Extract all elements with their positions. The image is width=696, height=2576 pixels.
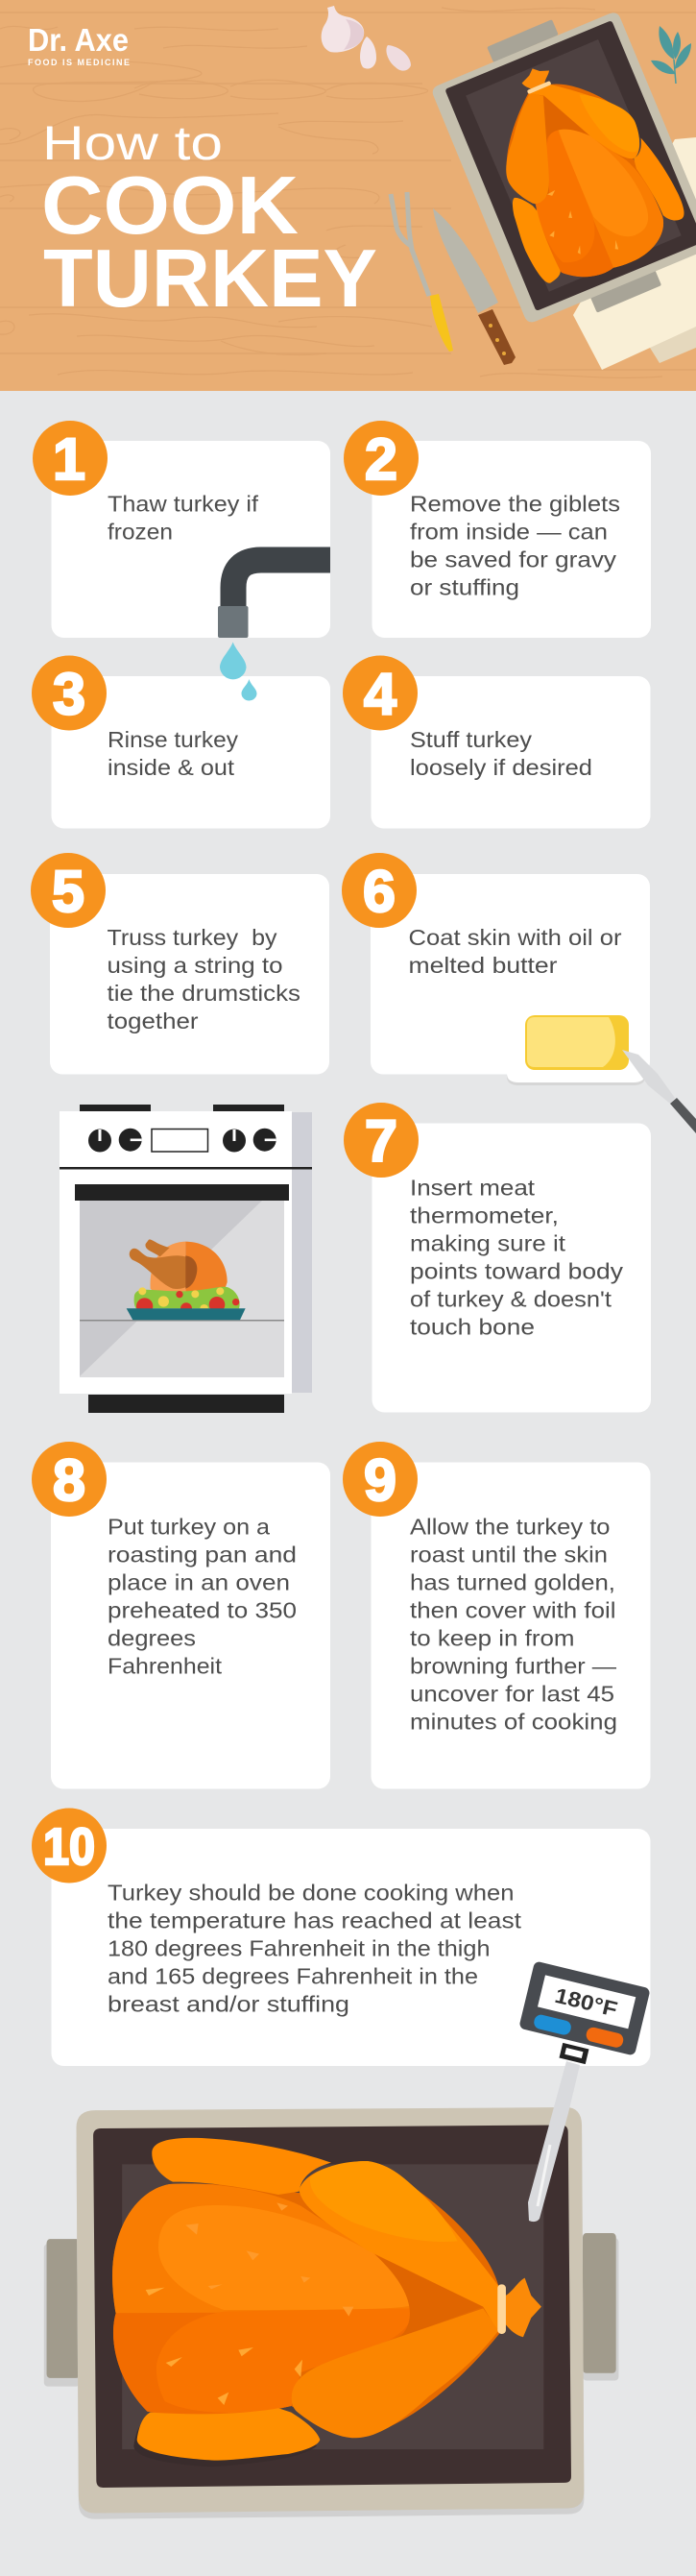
step 7 text: thermometer,: [410, 1203, 559, 1227]
step 2 badge: [344, 421, 419, 496]
step 7 badge: [344, 1103, 419, 1178]
step 6 badge: [342, 853, 417, 928]
step 8 text: Put turkey on a: [108, 1514, 270, 1539]
step 9 badge: [343, 1442, 418, 1517]
step 5 text: [108, 925, 300, 1033]
header roasting pan with turkey: [421, 0, 696, 339]
icon: carving fork: [391, 192, 453, 352]
step 9 text: [410, 1514, 617, 1735]
roasting pan with turkey: [44, 2107, 618, 2519]
title: [41, 116, 377, 325]
panel: step 6: [342, 853, 650, 1074]
step 2 text: Remove the giblets: [410, 492, 620, 517]
step 3 text: [108, 727, 239, 780]
icon: thermometer reading 180°F: [518, 1960, 651, 2222]
icon: thermometer reading 180°F: 180°F: [553, 1983, 620, 2022]
step 5 badge: [31, 853, 106, 928]
step 2 text: from inside — can: [410, 519, 608, 544]
step 7 badge: 7: [365, 1108, 397, 1174]
step 9 text: then cover with foil: [410, 1598, 616, 1623]
step 9 text: Allow the turkey to: [410, 1514, 611, 1539]
step 1 badge: 1: [53, 426, 85, 492]
step 9 text: to keep in from: [410, 1625, 574, 1650]
step 9 text: roast until the skin: [410, 1543, 608, 1567]
step 8 text: preheated to 350: [108, 1598, 297, 1623]
logo: FOOD IS MEDICINE: [28, 58, 130, 67]
icon: herb leaves: [651, 26, 691, 84]
panel: step 9: [343, 1442, 651, 1788]
step 3 text: inside & out: [108, 755, 235, 780]
panel: step 5: [31, 853, 329, 1074]
step 1 text: frozen: [108, 519, 173, 544]
step 5 text: tie the drumsticks: [108, 981, 300, 1006]
step 8 badge: [32, 1442, 107, 1517]
panel: step 10: [32, 1808, 651, 2066]
step 8 text: roasting pan and: [108, 1543, 297, 1567]
step 8 badge: 8: [53, 1447, 85, 1513]
step 2 text: or stuffing: [410, 574, 519, 599]
step 5 text: Truss turkey by: [108, 925, 277, 950]
step 6 text: melted butter: [409, 953, 558, 978]
step 4 text: loosely if desired: [410, 755, 592, 780]
step 1 badge: [33, 421, 108, 496]
step 2 text: [410, 492, 620, 599]
panel: step 7: [344, 1103, 651, 1412]
step 10 badge: 10: [43, 1818, 95, 1876]
panel: step 4: [343, 655, 651, 828]
icon: butter on plate with knife: [507, 1009, 696, 1133]
title: How to: [42, 116, 223, 170]
step 6 badge: 6: [363, 859, 396, 924]
step 2 badge: 2: [365, 426, 397, 492]
panel: step 2: [344, 421, 651, 638]
step 8 text: [108, 1514, 297, 1679]
step 5 text: using a string to: [108, 953, 282, 978]
icon: garlic: [322, 6, 411, 71]
step 8 text: degrees: [108, 1625, 196, 1650]
step 7 text: making sure it: [410, 1231, 566, 1256]
step 10 text: and 165 degrees Fahrenheit in the: [108, 1963, 478, 1988]
step 8 text: place in an oven: [108, 1569, 290, 1594]
panel: step 3: [32, 655, 330, 828]
step 3 text: Rinse turkey: [108, 727, 239, 752]
step 3 badge: [32, 655, 107, 730]
step 7 text: of turkey & doesn't: [410, 1287, 612, 1312]
step 4 text: [410, 727, 592, 780]
step 1 text: Thaw turkey if: [108, 492, 259, 517]
step 10 text: [108, 1881, 522, 2017]
step 5 text: together: [108, 1009, 199, 1033]
step 10 badge: [32, 1808, 107, 1883]
step 8 text: Fahrenheit: [108, 1654, 223, 1679]
step 7 text: Insert meat: [410, 1176, 536, 1201]
step 9 badge: 9: [364, 1447, 396, 1513]
step 10 text: the temperature has reached at least: [108, 1908, 522, 1932]
icon: towel: [573, 137, 696, 370]
title: COOK: [41, 160, 299, 252]
step 9 text: browning further —: [410, 1654, 616, 1679]
icon: faucet with water drops: [218, 560, 330, 701]
step 2 text: be saved for gravy: [410, 547, 617, 572]
step 10 text: 180 degrees Fahrenheit in the thigh: [108, 1936, 490, 1961]
step 6 text: [409, 925, 622, 978]
step 9 text: has turned golden,: [410, 1569, 615, 1594]
step 10 text: breast and/or stuffing: [108, 1992, 349, 2017]
step 6 text: Coat skin with oil or: [409, 925, 622, 950]
panel: step 8: [32, 1442, 330, 1788]
logo: Dr. Axe: [28, 22, 129, 58]
icon: oven with turkey: [60, 1105, 312, 1413]
step 7 text: [410, 1176, 624, 1339]
icon: knife: [433, 208, 516, 365]
step 10 text: Turkey should be done cooking when: [108, 1881, 515, 1906]
step 3 badge: 3: [53, 661, 85, 726]
step 7 text: points toward body: [410, 1258, 624, 1283]
step 4 badge: 4: [364, 661, 396, 726]
step 9 text: minutes of cooking: [410, 1710, 617, 1735]
step 1 text: [108, 492, 259, 544]
step 4 badge: [343, 655, 418, 730]
panel: step 1: [33, 421, 330, 638]
title: TURKEY: [43, 233, 377, 325]
step 5 badge: 5: [52, 859, 84, 924]
step 7 text: touch bone: [410, 1314, 535, 1339]
step 9 text: uncover for last 45: [410, 1681, 614, 1706]
header: wood table: [0, 0, 696, 391]
step 4 text: Stuff turkey: [410, 727, 533, 752]
